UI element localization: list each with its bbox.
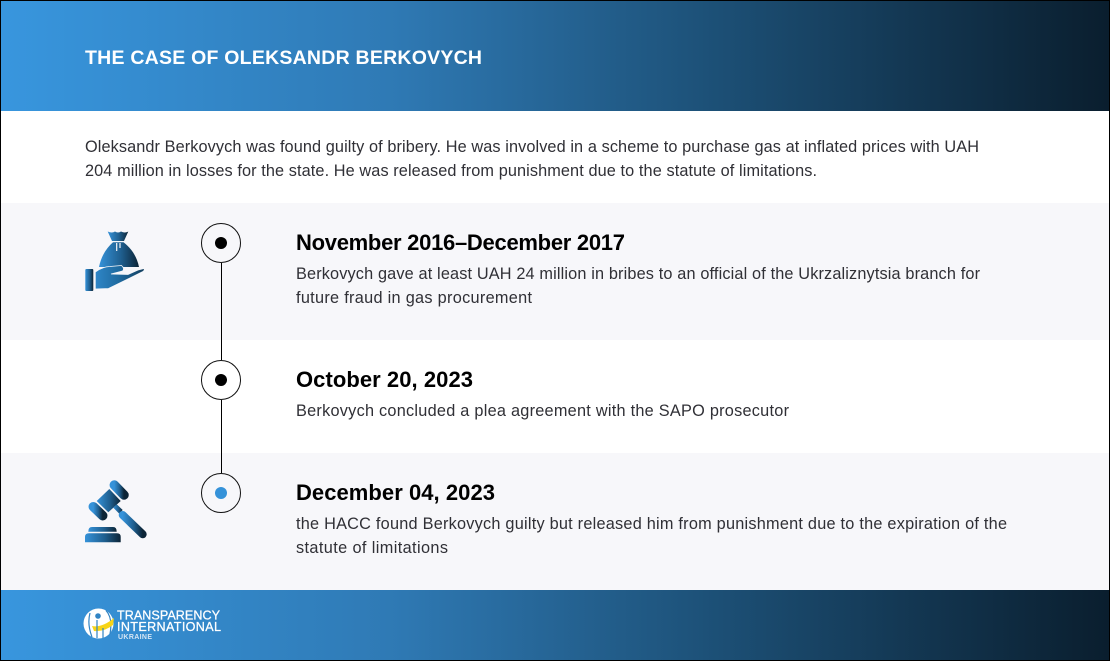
- footer band: [1, 590, 1109, 660]
- logo: Transparency International Ukraine: [84, 608, 221, 641]
- event 1: Berkovych gave at least UAH 24 million in bribes to an official of the Ukrzaliznytsia branch for: [296, 265, 981, 283]
- icon: money bag in hand: [85, 232, 144, 291]
- title: THE CASE OF OLEKSANDR BERKOVYCH: [85, 47, 482, 69]
- event 2: Berkovych concluded a plea agreement with the SAPO prosecutor: [296, 402, 790, 420]
- event 3: [296, 480, 1007, 557]
- event 1: future fraud in gas procurement: [296, 289, 532, 307]
- panel: row 3 background: [1, 453, 1109, 590]
- intro text: 204 million in losses for the state. He was released from punishment due to the statute of limitations.: [85, 162, 817, 180]
- panel: row 1 background: [1, 203, 1109, 340]
- event 2: [296, 367, 790, 420]
- timeline marker 1: [202, 224, 240, 262]
- intro text: Oleksandr Berkovych was found guilty of bribery. He was involved in a scheme to purchase gas at inflated prices with UAH: [85, 138, 979, 156]
- event 3: December 04, 2023: [296, 480, 495, 505]
- event 2: October 20, 2023: [296, 367, 473, 392]
- timeline marker 3: [202, 474, 240, 512]
- event 1: November 2016–December 2017: [296, 230, 625, 255]
- logo: Transparency International Ukraine: TRANSPARENCY: [117, 608, 221, 622]
- timeline marker 2: [202, 360, 240, 400]
- timeline connector: [220, 263, 222, 473]
- header band: [1, 1, 1109, 111]
- icon: judge gavel: [85, 485, 143, 542]
- event 1: [296, 230, 981, 307]
- event 3: statute of limitations: [296, 539, 448, 557]
- intro text: [85, 138, 979, 180]
- logo: Transparency International Ukraine: UKRAINE: [118, 634, 152, 641]
- event 3: the HACC found Berkovych guilty but released him from punishment due to the expiration of the: [296, 515, 1007, 533]
- logo: Transparency International Ukraine: INTERNATIONAL: [117, 620, 221, 634]
